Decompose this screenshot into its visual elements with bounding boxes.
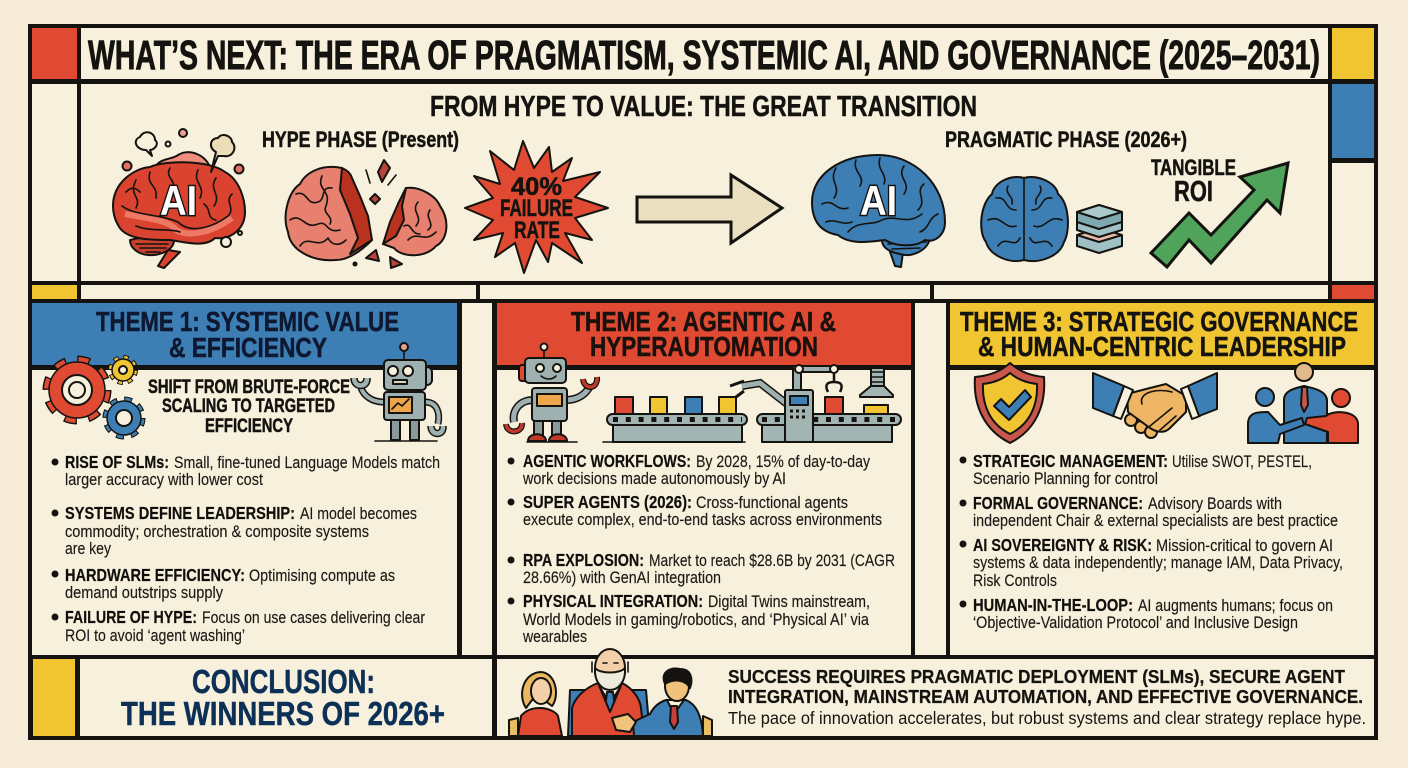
callout: 40 percent failure rate: FAILURE [500, 195, 573, 222]
bullet: human in the loop: AI augments humans; focus on [1138, 596, 1333, 615]
panel: from hype to value [113, 91, 1288, 273]
bullet: AI sovereignty and risk: Risk Controls [973, 571, 1057, 590]
label: pragmatic phase: PRAGMATIC PHASE (2026+) [945, 127, 1187, 152]
bullet: formal governance: Advisory Boards with [1148, 494, 1282, 513]
theme 2 header: HYPERAUTOMATION [590, 331, 818, 362]
bullet: physical integration [508, 591, 870, 646]
bullet: rise of SLMs: RISE OF SLMs: [65, 452, 169, 472]
bullet: physical integration: PHYSICAL INTEGRATION: [523, 591, 703, 611]
bullet: RPA explosion: 28.66%) with GenAI integration [523, 568, 721, 587]
theme 3 header [950, 303, 1374, 365]
icon: overheating AI brain [113, 129, 245, 268]
bullet: strategic management [960, 451, 1312, 488]
icon: robot with chart [351, 343, 446, 441]
theme 3 body background [950, 365, 1374, 655]
bullet: hardware efficiency: demand outstrips supply [65, 583, 223, 602]
bullet: physical integration: World Models in gaming/robotics, and ‘Physical AI’ via [523, 610, 869, 629]
heading: great transition: FROM HYPE TO VALUE: THE GREAT TRANSITION [430, 91, 977, 123]
callout: 40 percent failure rate: RATE [514, 217, 560, 244]
bullet: formal governance: FORMAL GOVERNANCE: [973, 493, 1143, 513]
bullet: super agents: execute complex, end-to-end tasks across environments [523, 510, 882, 529]
conclusion heading: THE WINNERS OF 2026+ [121, 695, 445, 732]
theme 1 header: THEME 1: SYSTEMIC VALUE [96, 306, 399, 337]
bullet: failure of hype: ROI to avoid ‘agent washing’ [65, 626, 245, 645]
icon: blue AI brain: AI [860, 177, 897, 224]
conclusion heading [121, 663, 445, 732]
icon: shield with check [975, 363, 1044, 443]
bullet: super agents: SUPER AGENTS (2026): [523, 492, 692, 512]
subheading: shift to targeted efficiency: SCALING TO TARGETED [162, 395, 335, 417]
bullet: AI sovereignty and risk: Mission-critical to govern AI [1156, 536, 1333, 555]
theme 2 header [497, 303, 911, 365]
icon: blue AI brain [812, 155, 945, 267]
theme 1 header: & EFFICIENCY [169, 332, 327, 363]
bullet: super agents [508, 492, 882, 529]
bullet: formal governance: independent Chair & external specialists are best practice [973, 511, 1338, 530]
bullet: failure of hype [52, 607, 425, 645]
subheading: shift to targeted efficiency: EFFICIENCY [205, 415, 293, 437]
conclusion text: The pace of innovation accelerates, but robust systems and clear strategy replace hype. [728, 708, 1366, 728]
bullet: systems define leadership: are key [65, 539, 111, 558]
panel: theme 3 [950, 303, 1374, 655]
bullet: RPA explosion: Market to reach $28.6B by 2031 (CAGR [649, 551, 895, 570]
icon: green growth arrow [1151, 163, 1288, 267]
bullet: rise of SLMs: larger accuracy with lower cost [65, 470, 263, 489]
bullet: rise of SLMs [52, 452, 440, 489]
bullet: systems define leadership: SYSTEMS DEFINE LEADERSHIP: [65, 503, 295, 523]
icon: smiling robot [506, 344, 597, 442]
conclusion text: SUCCESS REQUIRES PRAGMATIC DEPLOYMENT (SLMs), SECURE AGENT [728, 667, 1345, 687]
conclusion heading: CONCLUSION: [192, 663, 375, 700]
icon: gears [48, 358, 142, 436]
bullet: rise of SLMs: Small, fine-tuned Language Models match [174, 453, 440, 472]
label: tangible ROI: ROI [1174, 176, 1213, 208]
theme 1 header [32, 303, 457, 365]
panel: theme 2 [497, 303, 911, 655]
bullet: hardware efficiency: Optimising compute as [249, 566, 395, 585]
bullet: agentic workflows [508, 451, 870, 488]
bullet: hardware efficiency [52, 565, 395, 602]
theme 1 body background [32, 365, 457, 655]
bullet: AI sovereignty and risk [960, 535, 1343, 590]
bullet: RPA explosion: RPA EXPLOSION: [523, 550, 644, 570]
bullet: formal governance [960, 493, 1338, 530]
bullet: AI sovereignty and risk: systems & data independently; manage IAM, Data Privacy, [973, 553, 1343, 572]
icon: server stack [1077, 205, 1122, 253]
bullet: hardware efficiency: HARDWARE EFFICIENCY: [65, 565, 245, 585]
bullet: agentic workflows: AGENTIC WORKFLOWS: [523, 451, 691, 471]
bullet: human in the loop: HUMAN-IN-THE-LOOP: [973, 595, 1133, 615]
icon: conveyor with boxes [603, 397, 747, 442]
callout: 40 percent failure rate [465, 141, 608, 273]
label: tangible ROI [1151, 155, 1236, 208]
bullet: RPA explosion [508, 550, 895, 587]
bullet: strategic management: STRATEGIC MANAGEMENT: [973, 451, 1168, 471]
bullet: failure of hype: Focus on use cases delivering clear [202, 608, 425, 627]
bullet: human in the loop [960, 595, 1333, 632]
icon: handshake [1093, 373, 1217, 438]
icon: small brain [981, 177, 1068, 261]
theme 2 header: THEME 2: AGENTIC AI & [571, 306, 836, 337]
bullet: physical integration: wearables [522, 627, 587, 646]
bullet: physical integration: Digital Twins mainstream, [708, 592, 870, 611]
icon: overheating AI brain: AI [160, 177, 197, 224]
icon: leadership group [1248, 363, 1358, 443]
theme 2 body background [497, 365, 911, 655]
subheading: shift to targeted efficiency [148, 376, 350, 437]
bullet: systems define leadership: AI model becomes [300, 504, 417, 523]
bullet: agentic workflows: By 2028, 15% of day-to-day [696, 452, 870, 471]
icon: broken brain [286, 160, 446, 268]
bullet: AI sovereignty and risk: AI SOVEREIGNTY & RISK: [973, 535, 1152, 555]
conclusion text [728, 667, 1366, 728]
label: tangible ROI: TANGIBLE [1151, 155, 1236, 180]
subheading: shift to targeted efficiency: SHIFT FROM BRUTE-FORCE [148, 376, 350, 398]
bullet: failure of hype: FAILURE OF HYPE: [65, 607, 197, 627]
callout: 40 percent failure rate: 40% [511, 173, 562, 201]
label: hype phase: HYPE PHASE (Present) [262, 127, 459, 152]
bullet: strategic management: Scenario Planning for control [973, 469, 1158, 488]
icon: robotic assembly line [730, 365, 901, 442]
illustration: business leaders shaking hands [509, 649, 712, 736]
arrow: transition [637, 175, 782, 243]
bullet: systems define leadership: commodity; orchestration & composite systems [65, 522, 369, 541]
bullet: strategic management: Utilise SWOT, PESTEL, [1172, 452, 1312, 471]
bullet: systems define leadership [52, 503, 417, 558]
bullet: agentic workflows: work decisions made autonomously by AI [522, 469, 786, 488]
bullet: human in the loop: ‘Objective-Validation Protocol’ and Inclusive Design [973, 613, 1298, 632]
bullet: super agents: Cross-functional agents [696, 493, 848, 512]
panel: theme 1 [32, 303, 457, 655]
conclusion text: INTEGRATION, MAINSTREAM AUTOMATION, AND EFFECTIVE GOVERNANCE. [728, 687, 1363, 707]
